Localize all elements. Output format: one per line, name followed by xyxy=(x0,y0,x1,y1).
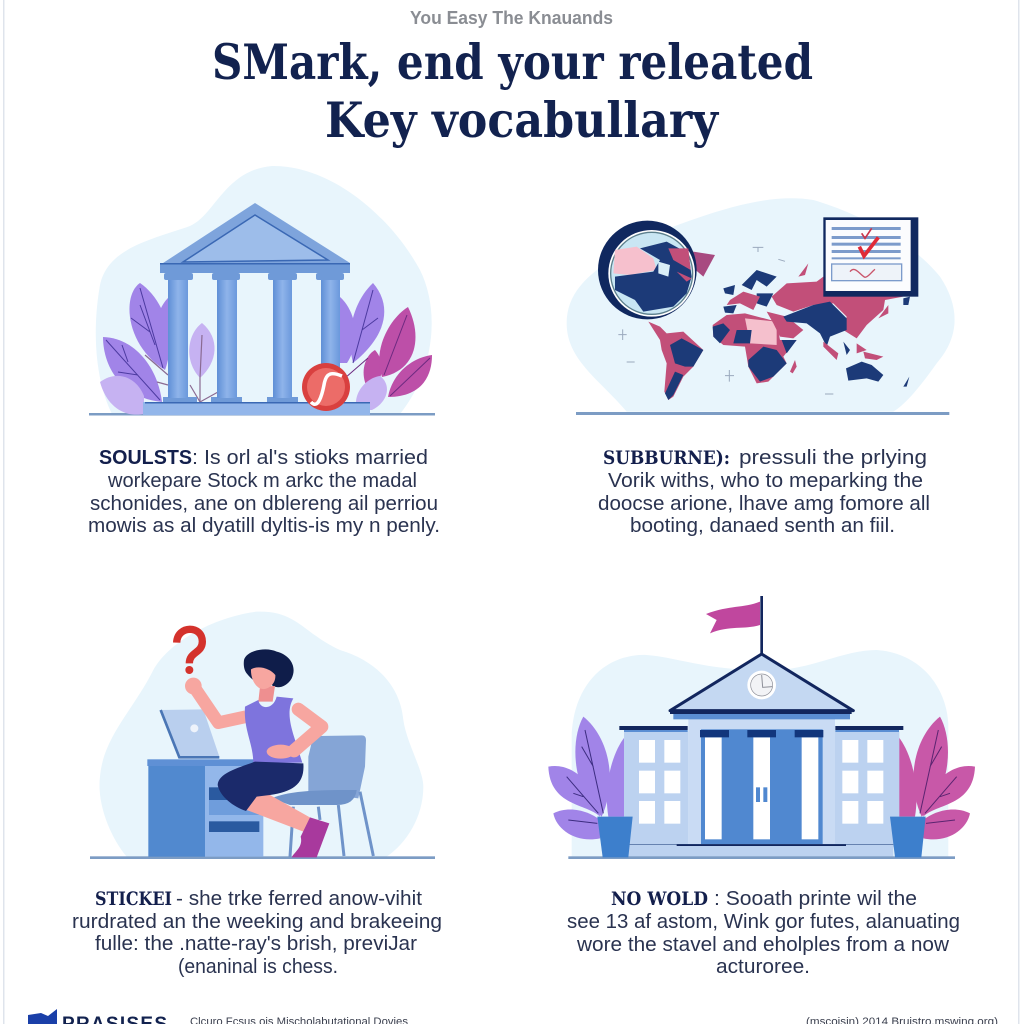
definition text: top right: Vorik withs, who to meparking the xyxy=(608,470,923,492)
definition text: bottom right: NO WOLD xyxy=(611,889,708,910)
icon: left leaves xyxy=(100,283,218,415)
icon: red check badge xyxy=(302,363,350,411)
definition text: top right: booting, danaed senth an fiil. xyxy=(630,515,895,537)
definition text: top left: mowis as al dyatill dyltis-is my n penly. xyxy=(88,515,440,537)
definition text: top right: pressuli the prlying xyxy=(739,447,927,469)
icon: left pot xyxy=(597,817,633,857)
definition text: bottom right: acturoree. xyxy=(716,956,810,978)
icon: flag xyxy=(706,596,763,654)
icon: report screen xyxy=(823,217,918,297)
icon: classical temple xyxy=(143,203,370,415)
ground line xyxy=(568,856,955,859)
definition text: bottom left: - she trke ferred anow-vihit xyxy=(176,888,422,910)
title xyxy=(212,33,813,149)
ground line xyxy=(90,856,435,859)
definition text: top right: SUBBURNE): xyxy=(603,448,730,469)
definition text: bottom left: (enaninal is chess. xyxy=(178,956,338,978)
definition text: top left: schonides, ane on dblereng ail perriou xyxy=(90,493,438,515)
icon: right leaves xyxy=(340,283,432,410)
icon: desk xyxy=(147,759,263,857)
decorative sparkles xyxy=(618,247,833,394)
definition text: top left xyxy=(88,447,440,537)
title: Key vocabullary xyxy=(325,91,719,149)
definition text: top left: : Is orl al's stioks married xyxy=(192,447,428,469)
icon: right pot xyxy=(890,817,926,857)
icon: question mark xyxy=(177,629,202,674)
icon: laptop xyxy=(161,709,219,757)
definition text: top right: doocse arione, lhave amg fomore all xyxy=(598,493,930,515)
icon: clock xyxy=(747,671,776,699)
definition text: bottom right: wore the stavel and eholples from a now xyxy=(576,934,950,956)
panel: person at desk illustration xyxy=(90,612,435,859)
definition text: top left: SOULSTS xyxy=(99,447,192,469)
background blob xyxy=(572,650,948,857)
eyebrow heading: You Easy The Knauands xyxy=(410,8,613,28)
panel: school building illustration xyxy=(548,596,975,859)
icon: building xyxy=(619,654,903,857)
icon: chair xyxy=(272,735,373,857)
background blob xyxy=(99,612,423,857)
panel: temple illustration xyxy=(89,166,435,416)
definition text: bottom left: rurdrated an the weeking and brakeeing xyxy=(72,911,442,933)
definition text: bottom right: : Sooath printe wil the xyxy=(714,888,917,910)
definition text: bottom right xyxy=(567,888,960,978)
icon: magenta plant xyxy=(898,717,975,839)
background blob xyxy=(567,198,955,412)
definition text: bottom left: STICKEI xyxy=(95,889,172,910)
definition text: bottom left xyxy=(72,888,442,978)
footer xyxy=(28,1009,998,1024)
definition text: bottom right: see 13 af astom, Wink gor futes, alanuating xyxy=(567,911,960,933)
ground line xyxy=(89,413,435,416)
icon: person xyxy=(185,649,329,857)
icon: magnifying globe xyxy=(598,221,697,319)
definition text: top left: workepare Stock m arkc the madal xyxy=(107,470,417,492)
title: SMark, end your releated xyxy=(212,33,813,91)
background blob xyxy=(96,166,432,414)
definition text: bottom left: fulle: the .natte-ray's brish, previJar xyxy=(95,933,417,955)
panel: world map illustration xyxy=(567,198,955,415)
definition text: top right xyxy=(598,447,930,537)
ground line xyxy=(576,412,949,415)
world map xyxy=(648,252,910,400)
icon: footer logo xyxy=(28,1009,57,1024)
icon: purple plant xyxy=(548,717,625,839)
